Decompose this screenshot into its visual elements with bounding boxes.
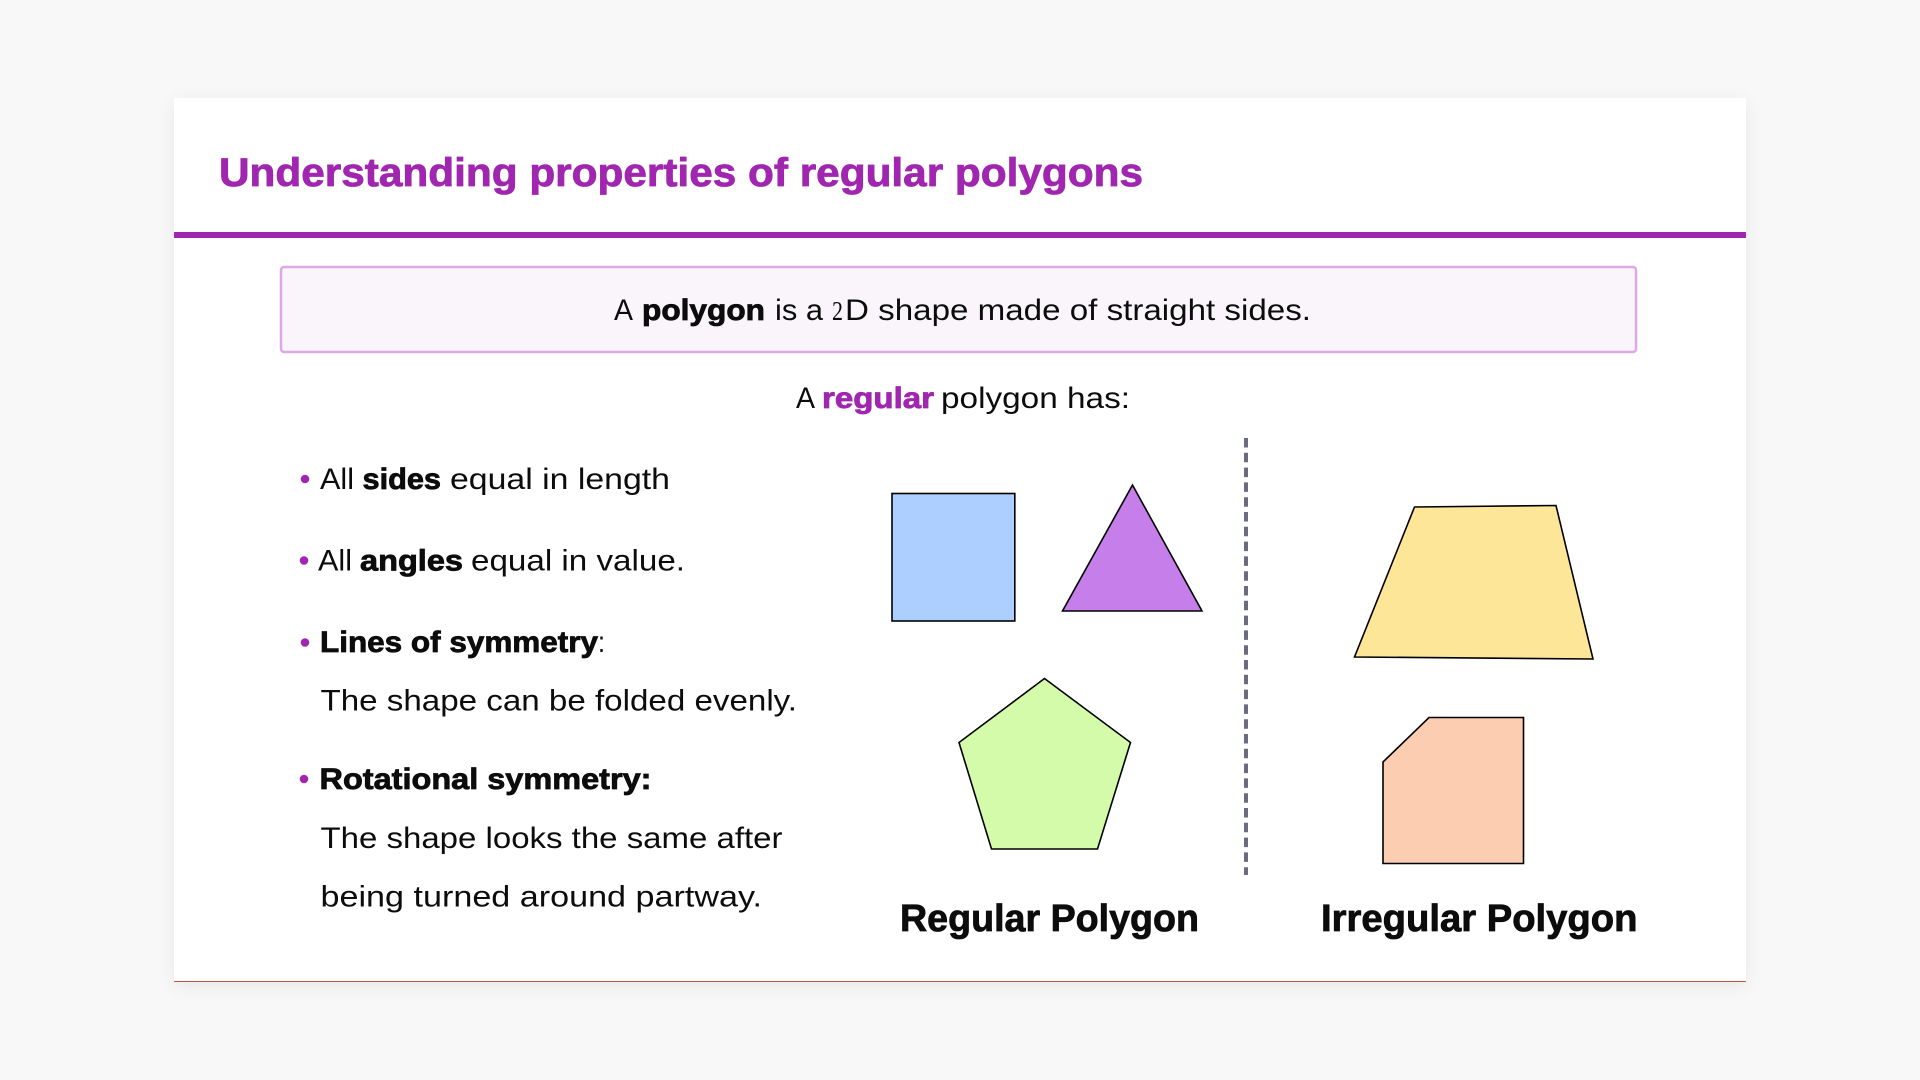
title: Understanding properties of regular polygons [219, 151, 1143, 195]
bullet: angles: equal in value. [471, 544, 685, 578]
bullet: angles: angles [360, 544, 463, 578]
bullet: lines of symmetry: Lines of symmetry [320, 626, 598, 659]
callout: polygon definition [281, 267, 1636, 352]
bullet: sides: All [320, 463, 354, 496]
heading: irregular polygon: Irregular Polygon [1321, 898, 1638, 940]
bullet: lines of symmetry: : [598, 626, 605, 659]
bullet: angles: All [318, 544, 352, 578]
panel: slide card [174, 98, 1746, 982]
bullet: sides: equal in length [450, 463, 670, 496]
icon: peach irregular pentagon [1383, 718, 1524, 864]
heading: regular polygon: Regular Polygon [900, 898, 1199, 940]
bullet: rotational symmetry: Rotational symmetry: [320, 763, 652, 796]
icon: purple triangle [1062, 485, 1202, 611]
icon: blue square [892, 494, 1015, 621]
bullet: rotational symmetry: The shape looks the same after [320, 822, 783, 855]
callout: polygon definition: polygon [642, 294, 765, 327]
subheading: a regular polygon has [796, 382, 1130, 415]
callout: polygon definition: A [614, 294, 633, 327]
bullet: sides [301, 463, 670, 496]
subheading: a regular polygon has: regular [822, 382, 934, 415]
subheading: a regular polygon has: A [796, 382, 815, 415]
callout: polygon definition: D shape made of straight sides. [845, 294, 1311, 327]
callout: polygon definition: is a [775, 294, 823, 327]
callout: polygon definition: 2 [832, 296, 843, 326]
divider: dashed line [1244, 438, 1248, 875]
bullet: rotational symmetry: being turned around partway. [320, 880, 762, 914]
bullet: sides: sides [362, 463, 441, 496]
bullet: lines of symmetry [301, 626, 797, 718]
header rule [174, 232, 1746, 238]
bullet: angles [300, 544, 685, 578]
icon: green pentagon [959, 678, 1130, 849]
bullet: rotational symmetry [300, 763, 783, 914]
bullet: lines of symmetry: The shape can be folded evenly. [320, 684, 797, 718]
bullet list: properties [300, 463, 797, 914]
icon: yellow trapezoid [1354, 506, 1593, 659]
subheading: a regular polygon has: polygon has: [941, 382, 1130, 415]
